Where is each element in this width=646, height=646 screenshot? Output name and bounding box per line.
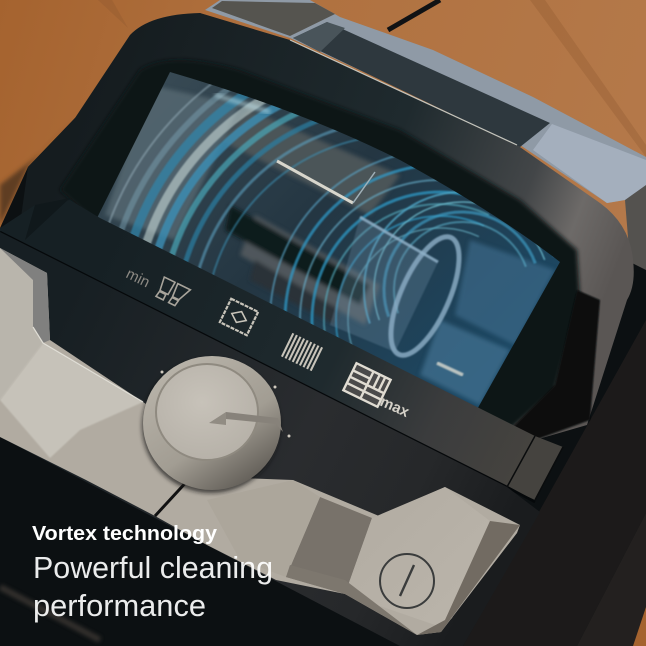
vacuum handle surround [20, 13, 634, 440]
caption text [32, 523, 273, 623]
icon: rug with diamond [220, 299, 258, 335]
faint reflection stripe [0, 587, 100, 640]
swirling blue arcs [108, 84, 554, 344]
label: min: min [123, 265, 152, 291]
grey internal bands [105, 85, 555, 405]
dial pointer [209, 412, 283, 432]
control panel [0, 232, 540, 646]
silver trim [0, 248, 520, 635]
white bar [277, 161, 353, 203]
dial tick marks [160, 370, 290, 438]
icon: woven carpet [343, 363, 391, 407]
water tank, top right [205, 0, 646, 270]
caption heading: Vortex technology [32, 523, 218, 545]
caption line 1: Powerful cleaning [33, 550, 273, 585]
icon: hard floor [155, 277, 190, 309]
air stream window [98, 72, 560, 580]
top edge glow [215, 95, 270, 112]
caption line 2: performance [33, 588, 206, 623]
label: max: max [377, 393, 412, 421]
power button symbol [380, 554, 434, 608]
icon strip [0, 198, 563, 502]
cable on floor [388, 0, 440, 30]
icon: striped carpet [282, 333, 322, 371]
clear tube [330, 217, 473, 364]
control dial [142, 356, 290, 493]
